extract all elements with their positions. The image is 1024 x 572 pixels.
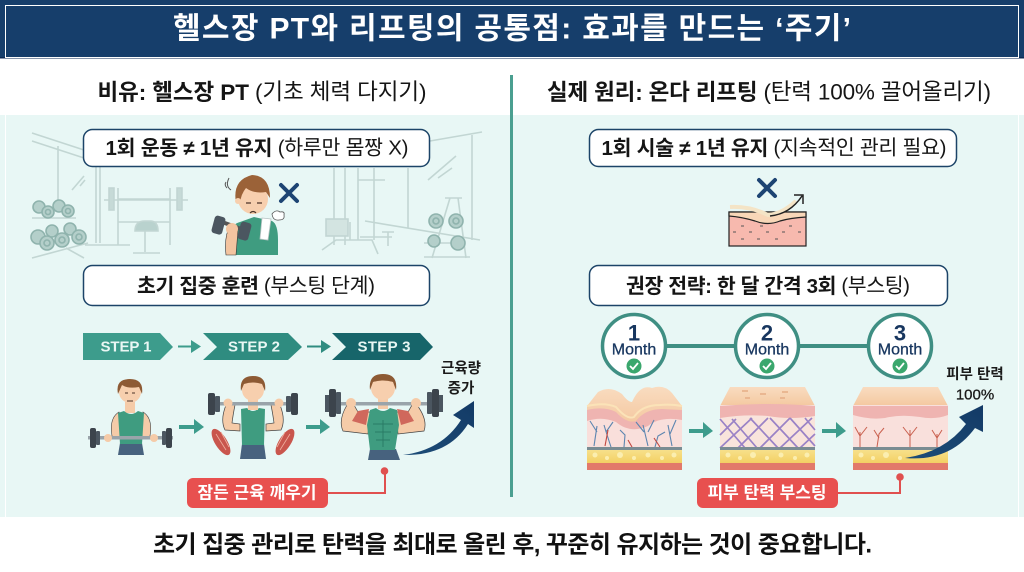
month 3 badge: 3 <box>894 320 906 346</box>
month 1 badge: Month <box>612 342 656 358</box>
icon: navy X <box>759 180 775 196</box>
right heading: 실제 원리: 온다 리프팅 (탄력 100% 끌어올리기) <box>547 80 991 104</box>
step 2 ribbon: STEP 2 <box>228 338 280 356</box>
skin block: firm <box>853 387 948 470</box>
growth arrow <box>403 401 474 455</box>
step 3 ribbon <box>332 333 433 360</box>
panel: right lifting principle <box>587 130 1004 508</box>
month 3 badge: Month <box>878 342 922 358</box>
icon: small skin section <box>729 195 806 246</box>
center divider <box>510 75 513 497</box>
arrow <box>307 340 331 353</box>
month 2 badge <box>736 314 798 378</box>
skin block: wrinkled <box>587 387 682 470</box>
label: muscle increase <box>441 360 481 397</box>
red callout: skin boosting: 피부 탄력 부스팅 <box>708 484 826 502</box>
red callout: skin boosting <box>697 473 904 508</box>
callout: recommended strategy <box>590 266 948 306</box>
icon: navy X <box>281 185 297 201</box>
gym background illustration <box>31 132 482 258</box>
callout: one workout <box>84 130 430 166</box>
callout: recommended strategy: 권장 전략: 한 달 간격 3회 (부스팅) <box>626 274 910 298</box>
callout: initial training: 초기 집중 훈련 (부스팅 단계) <box>137 274 375 298</box>
panel: left gym analogy <box>31 130 482 508</box>
red callout: wake muscles <box>187 467 388 508</box>
arrow <box>306 419 330 434</box>
month 2 badge: Month <box>745 342 789 358</box>
skin block: collagen <box>720 387 815 470</box>
label: skin elasticity: 100% <box>956 386 994 404</box>
growth arrow <box>905 405 983 458</box>
label: muscle increase: 증가 <box>448 380 474 397</box>
figure: strong muscles <box>325 374 443 460</box>
callout: initial training <box>84 266 430 306</box>
month 1 badge <box>602 314 666 378</box>
arrow <box>822 422 846 438</box>
callout: one treatment <box>590 130 956 166</box>
month 1 badge: 1 <box>628 320 640 346</box>
title banner <box>0 0 1024 58</box>
month 2 badge: 2 <box>761 320 773 346</box>
title banner: 헬스장 PT와 리프팅의 공통점: 효과를 만드는 ‘주기’ <box>173 12 851 46</box>
footer takeaway: 초기 집중 관리로 탄력을 최대로 올린 후, 꾸준히 유지하는 것이 중요합니다. <box>153 532 872 558</box>
icon: tired man with dumbbell <box>211 175 284 255</box>
figure: beginner with barbell <box>88 379 173 455</box>
label: muscle increase: 근육량 <box>441 360 481 377</box>
step 2 ribbon <box>203 333 302 360</box>
callout: one workout: 1회 운동 ≠ 1년 유지 (하루만 몸짱 X) <box>106 136 408 160</box>
figure: waking muscles <box>208 376 298 459</box>
step 1 ribbon: STEP 1 <box>100 338 152 356</box>
callout: one treatment: 1회 시술 ≠ 1년 유지 (지속적인 관리 필요) <box>602 136 946 160</box>
label: skin elasticity: 피부 탄력 <box>946 366 1004 383</box>
label: skin elasticity <box>946 366 1004 404</box>
step 1 ribbon <box>83 333 173 360</box>
step 3 ribbon: STEP 3 <box>358 338 410 356</box>
timeline connector <box>634 344 900 348</box>
month 3 badge <box>868 314 932 378</box>
red callout: wake muscles: 잠든 근육 깨우기 <box>198 484 316 502</box>
arrow <box>179 419 204 434</box>
arrow <box>689 422 713 438</box>
arrow <box>178 340 201 353</box>
left heading: 비유: 헬스장 PT (기초 체력 다지기) <box>98 80 426 104</box>
panel background <box>0 115 1024 517</box>
